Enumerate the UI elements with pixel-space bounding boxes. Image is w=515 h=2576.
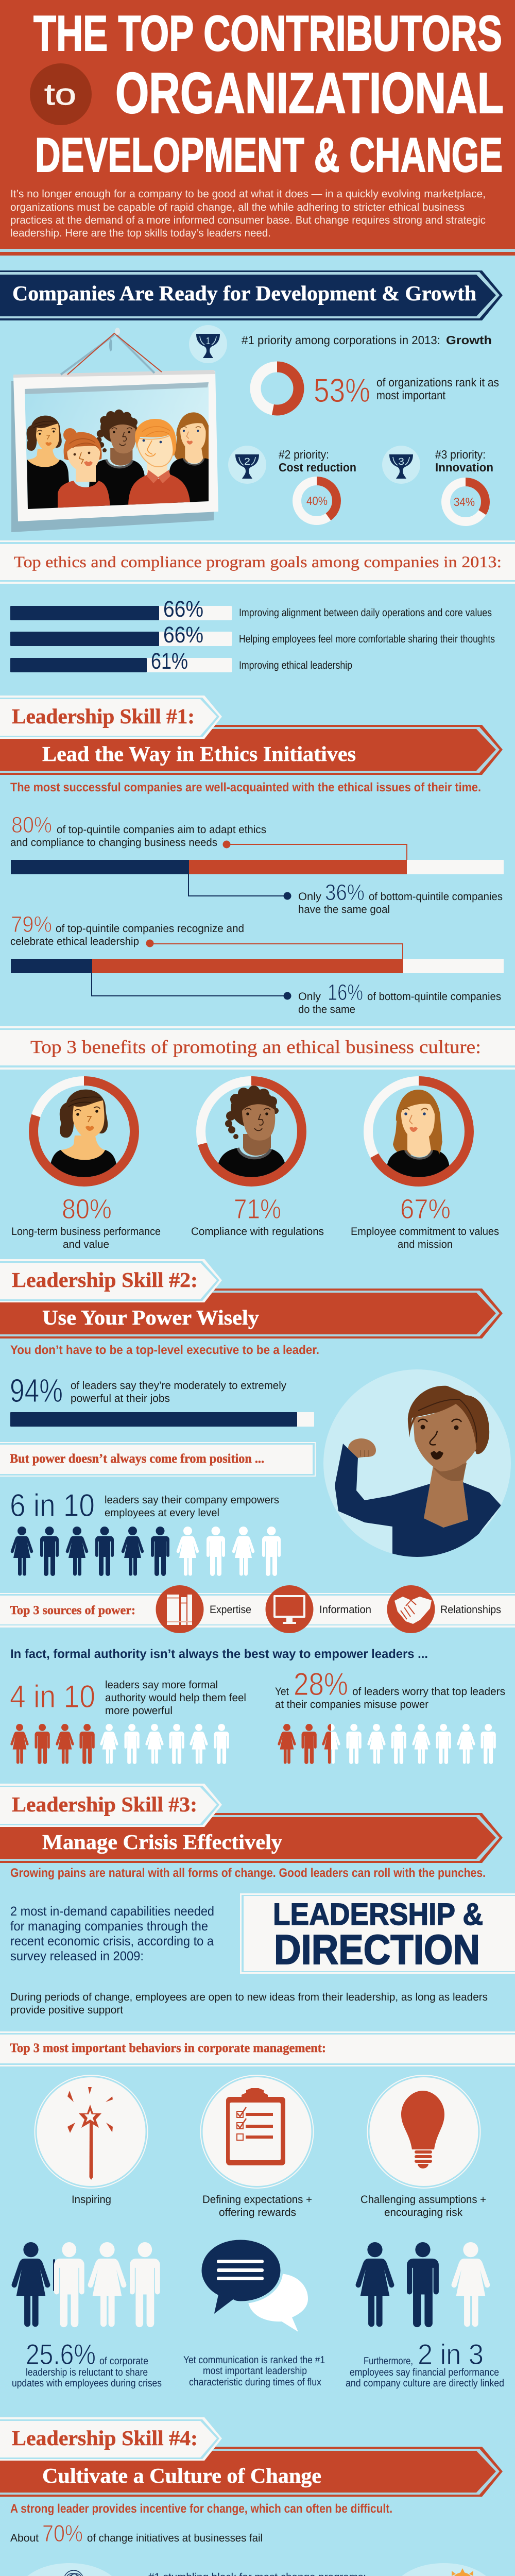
callout: leadership and direction bbox=[240, 1893, 515, 1974]
stat: 94% powerful: of leaders say they’re moderately to extremely bbox=[71, 1380, 286, 1392]
stat: 25.6%: leadership is reluctant to share bbox=[26, 2367, 148, 2378]
banner: leadership skill 1 bbox=[0, 696, 503, 775]
ring portrait bbox=[364, 1076, 474, 1187]
stat text: Employee commitment to values bbox=[351, 1226, 499, 1238]
icon: trophy 2: 2 bbox=[244, 456, 250, 467]
subheading: skill 2: You don’t have to be a top-level executive to be a leader. bbox=[10, 1343, 319, 1357]
icon: speech bubbles bbox=[200, 2239, 308, 2332]
behavior: defining expectations: Defining expectations + bbox=[202, 2194, 312, 2206]
comparison chart: 80 vs 36: 36% bbox=[325, 880, 365, 905]
stat: 4 in 10: more powerful bbox=[105, 1705, 173, 1717]
icon: trophy 1 bbox=[189, 325, 227, 363]
donut chart: 34%: 34% bbox=[454, 495, 475, 509]
banner: leadership skill 1: Lead the Way in Ethics Initiatives bbox=[42, 742, 356, 766]
stat: 94% powerful bbox=[10, 1372, 314, 1427]
label: Cost reduction bbox=[279, 461, 356, 474]
band: ethics goals heading bbox=[0, 540, 515, 584]
icon: light bulb bbox=[367, 2075, 481, 2189]
band: top 3 sources of power bbox=[0, 1585, 515, 1633]
donut chart: 40% bbox=[297, 481, 337, 520]
ring portrait bbox=[29, 1076, 139, 1187]
text: in-demand capabilities: recent economic crisis, according to a bbox=[10, 1934, 214, 1948]
pictogram: four employees bbox=[12, 2242, 160, 2327]
pictogram row: 28 percent bbox=[278, 1724, 496, 1764]
banner: leadership skill 4 bbox=[0, 2417, 503, 2497]
priority 3: innovation bbox=[382, 446, 493, 521]
text: communication: characteristic during times of flux bbox=[189, 2377, 321, 2388]
behavior: inspiring: Inspiring bbox=[72, 2194, 111, 2206]
stat text: Long-term business performance bbox=[11, 1226, 161, 1238]
illustration: woman flexing bbox=[323, 1369, 511, 1561]
priority heading: #1 priority among corporations in 2013: bbox=[242, 333, 440, 347]
text: in-demand capabilities bbox=[10, 1904, 214, 1963]
stat text bbox=[11, 1194, 161, 1250]
banner: leadership skill 2: Leadership Skill #2: bbox=[12, 1268, 198, 1292]
pictogram: three employees bbox=[356, 2242, 490, 2327]
banner: leadership skill 2 bbox=[0, 1259, 503, 1338]
donut chart: 53% bbox=[255, 367, 299, 410]
stat: 70% fail: 70% bbox=[42, 2520, 83, 2547]
stat text: 71% bbox=[234, 1194, 281, 1225]
stat: 4 in 10: leaders say more formal bbox=[105, 1679, 218, 1691]
comparison chart: 79 vs 16: of top-quintile companies recognize and bbox=[56, 923, 244, 935]
intro paragraph: practices at the demand of a more informed consumer base. But change requires strong and strategic bbox=[10, 214, 486, 226]
stat: 53%: 53% bbox=[314, 371, 370, 409]
stat: 6 in 10: employees at every level bbox=[105, 1507, 219, 1519]
banner: leadership skill 3: Manage Crisis Effectively bbox=[42, 1830, 283, 1854]
stat: 28%: of leaders worry that top leaders bbox=[352, 1686, 505, 1698]
stat: 2 in 3 bbox=[346, 2338, 504, 2389]
stat: 28%: Yet bbox=[275, 1686, 289, 1698]
behavior: defining expectations bbox=[200, 2075, 314, 2218]
stat text: 80% bbox=[62, 1194, 112, 1225]
text: communication: most important leadership bbox=[203, 2365, 307, 2377]
priority heading: Growth bbox=[446, 333, 492, 347]
stat: 6 in 10: 6 in 10 bbox=[10, 1488, 95, 1523]
stat: 2 in 3: Furthermore, bbox=[364, 2355, 413, 2367]
stat: 2 in 3: employees say financial performance bbox=[350, 2367, 499, 2378]
comparison chart: 79 vs 16 bbox=[10, 912, 504, 1015]
comparison chart: 80 vs 36: have the same goal bbox=[298, 904, 390, 916]
ring portrait bbox=[196, 1076, 306, 1187]
icon: clipboard checklist bbox=[200, 2075, 314, 2189]
illustration: frustrated leader bbox=[9, 2563, 130, 2576]
stat text bbox=[191, 1194, 324, 1238]
stat: 28%: 28% bbox=[294, 1667, 348, 1702]
pictogram row: 6 of 10 bbox=[11, 1527, 281, 1576]
stat: 2 in 3: 2 in 3 bbox=[418, 2338, 484, 2370]
bar chart: ethics goals: 66% bbox=[163, 622, 203, 648]
banner: companies are ready: Companies Are Ready for Development & Growth bbox=[12, 281, 476, 305]
stat text: 67% bbox=[400, 1194, 451, 1225]
stat: 28% bbox=[275, 1667, 505, 1764]
stat: 4 in 10: 4 in 10 bbox=[10, 1679, 95, 1715]
band: top 3 benefits heading bbox=[0, 1026, 515, 1070]
band: top 3 sources of power: Relationships bbox=[440, 1604, 501, 1616]
donut chart: 40%: 40% bbox=[306, 494, 328, 507]
banner: leadership skill 4: Leadership Skill #4: bbox=[12, 2426, 198, 2450]
title bbox=[33, 5, 504, 182]
comparison chart: 80 vs 36 bbox=[10, 812, 504, 916]
band: top 3 sources of power: Top 3 sources of power: bbox=[10, 1604, 135, 1617]
behavior: challenging assumptions: Challenging assumptions + bbox=[360, 2194, 486, 2206]
intro paragraph: leadership. Here are the top skills today’s leaders need. bbox=[10, 227, 271, 239]
stat: 25.6%: 25.6% bbox=[26, 2338, 96, 2370]
stat: 70% fail: About bbox=[10, 2532, 39, 2544]
stat: 70% fail bbox=[10, 2520, 263, 2547]
stat text: Compliance with regulations bbox=[191, 1226, 324, 1238]
banner: leadership skill 1: Leadership Skill #1: bbox=[12, 704, 195, 728]
stat text: and mission bbox=[398, 1239, 453, 1250]
bar chart: ethics goals: 61% bbox=[151, 649, 188, 674]
behavior: challenging assumptions: encouraging risk bbox=[384, 2207, 462, 2218]
stat: 70% fail: of change initiatives at businesses fail bbox=[87, 2532, 263, 2544]
text: periods of change: During periods of change, employees are open to new ideas from their leadership, as long as leaders bbox=[10, 1991, 488, 2003]
subheading: formal authority: In fact, formal authority isn’t always the best way to empower leaders ... bbox=[10, 1647, 428, 1661]
benefit: 80% long-term performance bbox=[11, 1081, 161, 1250]
band: corporate management behaviors: Top 3 most important behaviors in corporate management: bbox=[10, 2041, 326, 2055]
comparison chart: 80 vs 36: Only bbox=[298, 891, 322, 903]
stat: 28%: at their companies misuse power bbox=[275, 1699, 428, 1710]
label: #2 priority: bbox=[279, 448, 329, 461]
icon: books bbox=[156, 1585, 204, 1633]
banner: companies are ready bbox=[0, 270, 503, 320]
benefit: 71% compliance bbox=[191, 1081, 324, 1238]
band: ethics goals heading: Top ethics and compliance program goals among companies in 2013: bbox=[14, 553, 502, 571]
donut chart: 34% bbox=[446, 482, 485, 521]
comparison chart: 79 vs 16: Only bbox=[298, 991, 321, 1003]
label: Innovation bbox=[435, 461, 493, 474]
label bbox=[279, 448, 356, 474]
bar chart: ethics goals: Improving ethical leadership bbox=[239, 659, 352, 671]
comparison chart: 80 vs 36: of top-quintile companies aim to adapt ethics bbox=[57, 824, 266, 836]
text: communication: Yet communication is ranked the #1 bbox=[183, 2354, 325, 2366]
comparison chart: 79 vs 16: 79% bbox=[11, 912, 52, 937]
stat text bbox=[351, 1194, 499, 1250]
callout: power and position: But power doesn’t always come from position ... bbox=[10, 1452, 264, 1466]
pictogram row: 4 of 10 bbox=[10, 1724, 229, 1764]
icon: handshake bbox=[387, 1585, 435, 1633]
callout: power and position bbox=[0, 1442, 316, 1477]
illustration: happy leader bbox=[384, 2563, 504, 2576]
band: top 3 sources of power: Information bbox=[319, 1604, 371, 1616]
comparison chart: 79 vs 16: 16% bbox=[328, 980, 363, 1005]
text: communication bbox=[183, 2354, 325, 2388]
stat: 94% powerful: 94% bbox=[10, 1372, 63, 1409]
banner: leadership skill 3 bbox=[0, 1784, 503, 1863]
framed team portrait bbox=[11, 328, 221, 532]
comparison chart: 79 vs 16: celebrate ethical leadership bbox=[10, 936, 139, 947]
icon: trophy 3: 3 bbox=[398, 456, 404, 467]
stat: 4 in 10 bbox=[10, 1679, 246, 1764]
band: top 3 benefits heading: Top 3 benefits of promoting an ethical business culture: bbox=[30, 1037, 481, 1057]
callout: leadership and direction: LEADERSHIP & bbox=[273, 1897, 483, 1931]
priority 1: growth bbox=[189, 325, 499, 410]
icon: magic wand bbox=[34, 2075, 148, 2189]
stat: 6 in 10 bbox=[10, 1488, 281, 1576]
stat: 53%: of organizations rank it as bbox=[376, 376, 499, 389]
label: #3 priority: bbox=[435, 448, 486, 461]
icon: trophy 1: 1 bbox=[206, 336, 210, 347]
comparison chart: 79 vs 16: do the same bbox=[298, 1004, 355, 1015]
text: in-demand capabilities: for managing companies through the bbox=[10, 1919, 208, 1934]
banner: leadership skill 4: Cultivate a Culture of Change bbox=[42, 2464, 321, 2488]
icon: trophy 2 bbox=[228, 446, 266, 484]
comparison chart: 80 vs 36: and compliance to changing business needs bbox=[10, 837, 217, 849]
icon: trophy 3 bbox=[382, 446, 420, 484]
stat: 53%: most important bbox=[376, 388, 446, 402]
stat: 53% bbox=[314, 371, 499, 409]
text: periods of change: provide positive support bbox=[10, 2004, 123, 2016]
comparison chart: 80 vs 36: 80% bbox=[11, 812, 52, 838]
subheading: skill 4: A strong leader provides incentive for change, which can often be difficult. bbox=[10, 2502, 392, 2516]
benefit: 67% commitment bbox=[351, 1081, 499, 1250]
header panel bbox=[0, 0, 515, 256]
band: top 3 sources of power: Expertise bbox=[210, 1604, 251, 1616]
title badge: to: to bbox=[44, 78, 76, 111]
intro paragraph bbox=[10, 188, 486, 239]
comparison chart: 80 vs 36: of bottom-quintile companies bbox=[369, 891, 503, 903]
intro paragraph: organizations must be capable of rapid change, all the while adhering to stricter ethical business bbox=[10, 201, 465, 213]
text: in-demand capabilities: 2 most in-demand capabilities needed bbox=[10, 1904, 214, 1919]
behavior: inspiring bbox=[34, 2075, 148, 2206]
behavior: challenging assumptions bbox=[360, 2075, 486, 2218]
priority 2: cost reduction bbox=[228, 446, 356, 520]
comparison chart: 79 vs 16: of bottom-quintile companies bbox=[367, 991, 501, 1003]
stat: 94% powerful: powerful at their jobs bbox=[71, 1393, 170, 1404]
banner: leadership skill 3: Leadership Skill #3: bbox=[12, 1792, 197, 1816]
text: in-demand capabilities: survey released in 2009: bbox=[10, 1949, 144, 1963]
band: corporate management behaviors bbox=[0, 2031, 515, 2066]
stat: 25.6% bbox=[12, 2338, 162, 2389]
text: periods of change bbox=[10, 1991, 488, 2016]
banner: leadership skill 2: Use Your Power Wisely bbox=[42, 1306, 260, 1329]
stat: 4 in 10: authority would help them feel bbox=[105, 1692, 246, 1704]
bar chart: ethics goals: 66% bbox=[163, 597, 203, 622]
title badge: to bbox=[30, 63, 92, 125]
stat: 25.6%: of corporate bbox=[99, 2355, 148, 2367]
label bbox=[435, 448, 493, 474]
bar chart: ethics goals bbox=[10, 597, 495, 674]
icon: computer monitor bbox=[266, 1585, 313, 1633]
callout: leadership and direction: DIRECTION bbox=[274, 1927, 480, 1973]
stat text: and value bbox=[63, 1239, 109, 1250]
intro paragraph: It’s no longer enough for a company to be good at what it does — in a quickly evolving marketplace, bbox=[10, 188, 486, 200]
stat: 6 in 10: leaders say their company empowers bbox=[105, 1494, 279, 1506]
behavior: defining expectations: offering rewards bbox=[219, 2207, 296, 2218]
stat: 25.6%: updates with employees during crises bbox=[12, 2378, 162, 2389]
